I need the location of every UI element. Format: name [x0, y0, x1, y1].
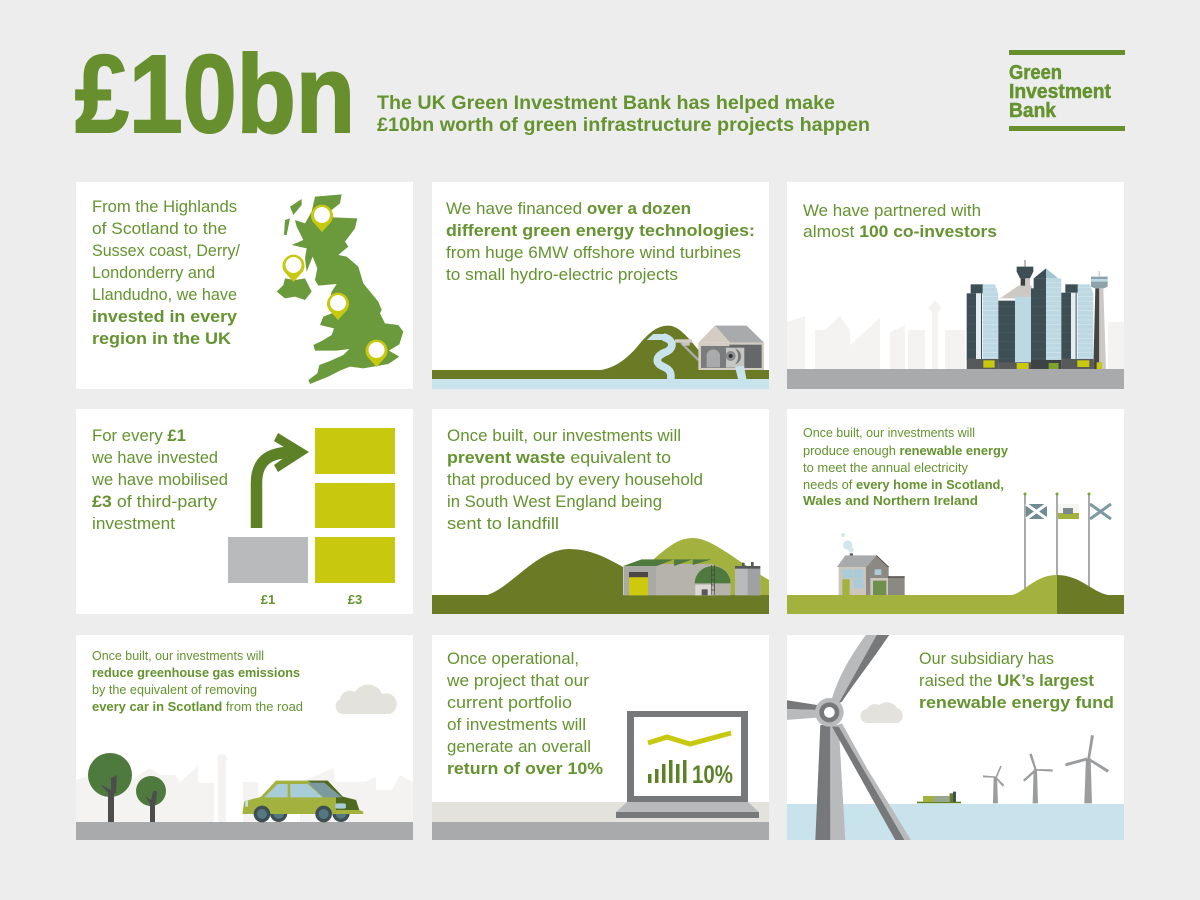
text: invested in every region: Londonderry and	[92, 263, 215, 282]
ground	[432, 595, 769, 614]
text: £1 mobilises £3: £3 of third-party	[92, 492, 218, 511]
text: technologies: We have financed over a dozen	[446, 199, 691, 218]
text: invested in every region	[92, 197, 240, 348]
text: £1 mobilises £3	[91, 426, 228, 533]
panel: green energy technologies	[432, 182, 769, 389]
text: prevent waste: Once built, our investments will	[447, 426, 681, 445]
ship	[917, 792, 961, 803]
text: prevent waste: prevent waste equivalent to	[447, 448, 671, 467]
text: UK's largest fund	[919, 649, 1114, 712]
panel: return on investment	[432, 635, 769, 840]
text: prevent waste	[447, 426, 703, 533]
text: return of over 10%: return of over 10%	[447, 759, 603, 778]
text: greenhouse gas	[92, 648, 303, 714]
text: £1 mobilises £3: For every £1	[92, 426, 186, 445]
pale skyline	[76, 754, 413, 822]
map pin: Wales	[327, 293, 349, 320]
text: co-investors: We have partnered with	[803, 201, 981, 220]
hills	[484, 538, 769, 596]
logo: Green Investment Bank	[1009, 50, 1125, 131]
small wind turbines	[983, 735, 1109, 803]
text: prevent waste: in South West England being	[447, 492, 662, 511]
tagline	[377, 93, 870, 136]
text: renewable energy	[803, 425, 1009, 508]
flagpoles and flags	[1024, 492, 1111, 591]
text: invested in every region: Sussex coast, Derry/	[92, 241, 240, 260]
10%: 10%	[692, 761, 733, 789]
text: UK's largest fund: Our subsidiary has	[919, 649, 1054, 668]
text: technologies: to small hydro-electric projects	[446, 265, 678, 284]
text: technologies	[446, 199, 755, 284]
tagline: The UK Green Investment Bank has helped make	[377, 93, 835, 114]
tagline: £10bn worth of green infrastructure projects happen	[377, 115, 870, 136]
panel: greenhouse gas reduction	[76, 635, 413, 840]
logo: Green Investment Bank: Bank	[1009, 100, 1057, 122]
sea	[787, 804, 1124, 840]
text: £1 mobilises £3: we have mobilised	[91, 470, 228, 489]
desk and floor	[432, 802, 769, 840]
text: invested in every region: of Scotland to the	[92, 219, 227, 238]
cloud	[336, 684, 397, 714]
text: co-investors: almost 100 co-investors	[803, 222, 997, 241]
text: renewable energy: produce enough renewable energy	[803, 443, 1009, 458]
waste plant	[623, 559, 760, 595]
house	[837, 533, 905, 595]
text: invested in every region: invested in every	[92, 307, 238, 326]
text: renewable energy: to meet the annual electricity	[803, 460, 968, 475]
text: return of over 10%	[446, 649, 603, 778]
road	[76, 822, 413, 840]
panel: prevent waste	[432, 409, 769, 614]
bar labels: £3	[348, 592, 362, 607]
pale skyline	[787, 300, 1124, 369]
text: £1 mobilises £3: investment	[92, 514, 175, 533]
hydro-electric scene	[600, 326, 764, 380]
bar: £1	[228, 537, 308, 583]
text: return of over 10%: generate an overall	[447, 737, 591, 756]
text: renewable energy: Wales and Northern Ireland	[803, 493, 978, 508]
text: greenhouse gas: Once built, our investments will	[92, 648, 264, 663]
logo: Green Investment Bank: Investment	[1009, 81, 1111, 103]
logo: Green Investment Bank: Green	[1009, 62, 1062, 84]
text: invested in every region: From the Highlands	[92, 197, 237, 216]
panel: renewable energy homes	[787, 409, 1124, 614]
road	[787, 369, 1124, 389]
panel: co-investors	[787, 182, 1124, 389]
ground and water	[432, 370, 769, 389]
line chart	[648, 733, 731, 744]
text: UK's largest fund: raised the UK’s largest	[919, 671, 1094, 690]
text: return of over 10%: Once operational,	[447, 649, 579, 668]
text: greenhouse gas: by the equivalent of removing	[92, 682, 257, 697]
laptop	[616, 711, 759, 818]
text: technologies: different green energy technologies:	[446, 221, 755, 240]
bar labels: £1	[261, 592, 275, 607]
map pin: Scotland	[311, 205, 333, 232]
text: invested in every region: Llandudno, we have	[92, 285, 237, 304]
header	[75, 33, 1125, 156]
bar labels	[261, 592, 362, 607]
text: greenhouse gas: reduce greenhouse gas emissions	[92, 665, 300, 680]
arrow	[256, 433, 309, 528]
map of the UK	[277, 194, 403, 384]
text: return of over 10%: current portfolio	[447, 693, 572, 712]
text: return of over 10%: of investments will	[447, 715, 586, 734]
large wind turbine	[785, 633, 911, 840]
map pin: Northern Ireland	[282, 255, 305, 282]
bar chart	[648, 760, 686, 783]
text: UK's largest fund: renewable energy fund	[919, 693, 1114, 712]
text: greenhouse gas: every car in Scotland from the road	[92, 699, 303, 714]
tree: large	[88, 753, 132, 822]
panel: UK regions map	[76, 182, 413, 389]
cloud	[860, 702, 903, 723]
bars: £3	[315, 428, 395, 583]
panel: renewable energy fund	[785, 633, 1124, 840]
tree: small	[136, 776, 166, 822]
map pin: Sussex	[365, 340, 388, 367]
panel: mobilised investment	[76, 409, 413, 614]
title: £10bn: £10bn	[75, 33, 355, 156]
text: £1 mobilises £3: we have invested	[91, 448, 218, 467]
text: prevent waste: sent to landfill	[447, 514, 559, 533]
car	[243, 781, 363, 822]
text: prevent waste: that produced by every household	[447, 470, 703, 489]
text: return of over 10%: we project that our	[446, 671, 589, 690]
text: renewable energy: Once built, our investments will	[803, 425, 975, 440]
text: invested in every region: region in the UK	[92, 329, 232, 348]
text: renewable energy: needs of every home in Scotland,	[803, 477, 1004, 492]
hill and ground	[787, 575, 1124, 614]
city towers	[967, 260, 1108, 369]
text: technologies: from huge 6MW offshore wind turbines	[446, 243, 741, 262]
text: co-investors	[803, 201, 997, 241]
